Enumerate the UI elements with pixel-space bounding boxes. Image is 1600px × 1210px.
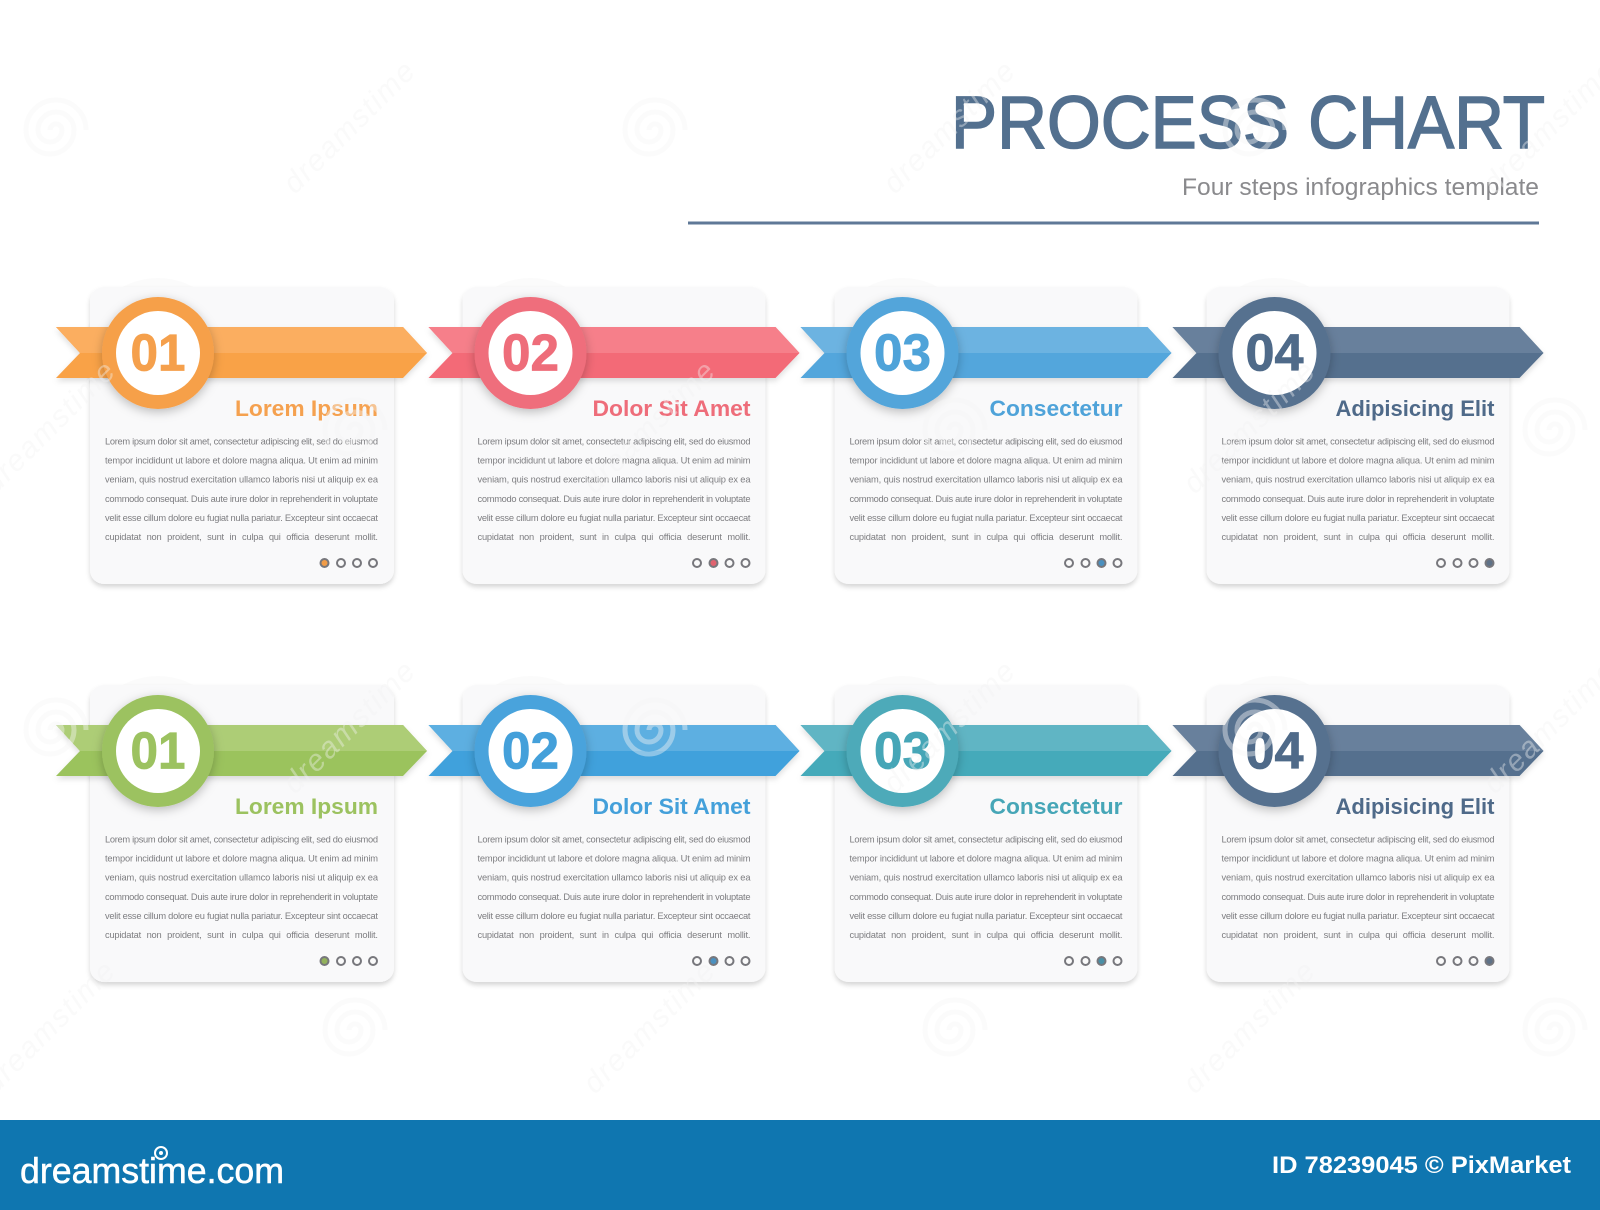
number badge 04: 04 bbox=[1246, 324, 1304, 382]
card halo bbox=[83, 676, 233, 826]
arrow ribbon bbox=[1172, 327, 1544, 378]
body text: commodo consequat. Duis aute irure dolor in reprehenderit in voluptate bbox=[1222, 892, 1494, 902]
body text: tempor incididunt ut labore et dolore magna aliqua. Ut enim ad minim bbox=[105, 854, 378, 864]
body text: velit esse cillum dolore eu fugiat nulla pariatur. Excepteur sint occaecat bbox=[1222, 513, 1495, 523]
body text bbox=[1222, 436, 1495, 542]
card halo bbox=[456, 278, 606, 428]
watermark overlay: dreamstime bbox=[577, 955, 722, 1100]
panel: row 2 step 2 blue bbox=[428, 676, 800, 982]
body text: velit esse cillum dolore eu fugiat nulla pariatur. Excepteur sint occaecat bbox=[850, 513, 1123, 523]
body text: cupidatat non proident, sunt in culpa qui officia deserunt mollit. bbox=[1222, 930, 1494, 940]
card heading: Dolor Sit Amet bbox=[592, 396, 751, 421]
card halo bbox=[83, 278, 233, 428]
card heading: Consectetur bbox=[990, 396, 1123, 421]
card heading: Lorem Ipsum bbox=[235, 396, 378, 421]
body text: tempor incididunt ut labore et dolore magna aliqua. Ut enim ad minim bbox=[850, 456, 1123, 466]
arrow ribbon bbox=[1172, 725, 1544, 776]
body text: velit esse cillum dolore eu fugiat nulla pariatur. Excepteur sint occaecat bbox=[478, 513, 751, 523]
number badge 03: 03 bbox=[874, 324, 931, 382]
body text: veniam, quis nostrud exercitation ullamco laboris nisi ut aliquip ex ea bbox=[478, 474, 751, 484]
body text bbox=[105, 436, 379, 542]
arrow ribbon bbox=[428, 327, 800, 378]
panel: row 1 step 3 blue bbox=[800, 278, 1172, 584]
watermark overlay: dreamstime bbox=[277, 655, 422, 800]
body text: Lorem ipsum dolor sit amet, consectetur adipiscing elit, sed do eiusmod bbox=[105, 834, 378, 844]
step dots bbox=[1437, 559, 1494, 567]
subtitle: Four steps infographics template bbox=[1182, 174, 1539, 201]
number badge 02 bbox=[474, 695, 586, 807]
card background bbox=[1206, 287, 1510, 584]
number badge 01: 01 bbox=[130, 722, 186, 780]
number badge 02: 02 bbox=[502, 324, 559, 382]
body text: velit esse cillum dolore eu fugiat nulla pariatur. Excepteur sint occaecat bbox=[850, 911, 1123, 921]
number badge 04 bbox=[1218, 297, 1330, 409]
body text: Lorem ipsum dolor sit amet, consectetur adipiscing elit, sed do eiusmod bbox=[850, 436, 1123, 446]
body text: cupidatat non proident, sunt in culpa qui officia deserunt mollit. bbox=[105, 930, 378, 940]
body text: commodo consequat. Duis aute irure dolor in reprehenderit in voluptate bbox=[478, 494, 750, 504]
body text: tempor incididunt ut labore et dolore magna aliqua. Ut enim ad minim bbox=[478, 854, 751, 864]
body text: Lorem ipsum dolor sit amet, consectetur adipiscing elit, sed do eiusmod bbox=[850, 834, 1123, 844]
card background bbox=[462, 287, 766, 584]
body text: commodo consequat. Duis aute irure dolor in reprehenderit in voluptate bbox=[850, 892, 1122, 902]
body text: veniam, quis nostrud exercitation ullamco laboris nisi ut aliquip ex ea bbox=[105, 474, 379, 484]
body text: Lorem ipsum dolor sit amet, consectetur adipiscing elit, sed do eiusmod bbox=[1222, 436, 1495, 446]
step dots bbox=[693, 957, 750, 965]
body text: commodo consequat. Duis aute irure dolor in reprehenderit in voluptate bbox=[105, 494, 378, 504]
number badge 02 bbox=[474, 297, 586, 409]
body text: veniam, quis nostrud exercitation ullamco laboris nisi ut aliquip ex ea bbox=[1222, 872, 1495, 882]
card halo bbox=[828, 676, 978, 826]
body text: veniam, quis nostrud exercitation ullamco laboris nisi ut aliquip ex ea bbox=[850, 872, 1123, 882]
number badge 03 bbox=[846, 297, 958, 409]
arrow ribbon bbox=[800, 725, 1172, 776]
watermark overlay: dreamstime bbox=[577, 355, 722, 500]
body text: velit esse cillum dolore eu fugiat nulla pariatur. Excepteur sint occaecat bbox=[105, 911, 378, 921]
watermark overlay: dreamstime bbox=[1177, 355, 1322, 500]
card halo bbox=[1200, 676, 1350, 826]
panel: row 2 step 4 navy bbox=[1172, 676, 1544, 982]
body text bbox=[850, 436, 1123, 542]
panel: row 1 step 4 navy bbox=[1172, 278, 1544, 584]
watermark overlay: dreamstime bbox=[877, 655, 1022, 800]
body text: velit esse cillum dolore eu fugiat nulla pariatur. Excepteur sint occaecat bbox=[105, 513, 378, 523]
body text: commodo consequat. Duis aute irure dolor in reprehenderit in voluptate bbox=[478, 892, 750, 902]
card halo bbox=[1200, 278, 1350, 428]
body text: commodo consequat. Duis aute irure dolor in reprehenderit in voluptate bbox=[850, 494, 1122, 504]
body text: cupidatat non proident, sunt in culpa qui officia deserunt mollit. bbox=[850, 532, 1122, 542]
body text bbox=[850, 834, 1123, 940]
number badge 01 bbox=[102, 695, 214, 807]
number badge 03 bbox=[846, 695, 958, 807]
card background bbox=[462, 685, 766, 982]
title: PROCESS CHART bbox=[951, 81, 1545, 164]
step dots bbox=[693, 559, 750, 567]
step dots bbox=[1065, 559, 1122, 567]
body text: Lorem ipsum dolor sit amet, consectetur adipiscing elit, sed do eiusmod bbox=[478, 436, 751, 446]
body text: cupidatat non proident, sunt in culpa qui officia deserunt mollit. bbox=[850, 930, 1122, 940]
body text: tempor incididunt ut labore et dolore magna aliqua. Ut enim ad minim bbox=[478, 456, 751, 466]
watermark overlay: dreamstime bbox=[1177, 955, 1322, 1100]
arrow ribbon bbox=[428, 725, 800, 776]
step dots bbox=[320, 559, 377, 567]
step dots bbox=[1065, 957, 1122, 965]
panel: row 2 step 3 teal bbox=[800, 676, 1172, 982]
step dots bbox=[1437, 957, 1494, 965]
card heading: Adipisicing Elit bbox=[1336, 396, 1495, 421]
body text: veniam, quis nostrud exercitation ullamco laboris nisi ut aliquip ex ea bbox=[1222, 474, 1495, 484]
body text: commodo consequat. Duis aute irure dolor in reprehenderit in voluptate bbox=[105, 892, 378, 902]
body text: commodo consequat. Duis aute irure dolor in reprehenderit in voluptate bbox=[1222, 494, 1494, 504]
body text: veniam, quis nostrud exercitation ullamco laboris nisi ut aliquip ex ea bbox=[105, 872, 379, 882]
card background bbox=[90, 287, 394, 584]
footer bar bbox=[0, 1120, 1600, 1210]
body text: tempor incididunt ut labore et dolore magna aliqua. Ut enim ad minim bbox=[105, 456, 378, 466]
body text bbox=[478, 436, 751, 542]
body text: cupidatat non proident, sunt in culpa qui officia deserunt mollit. bbox=[105, 532, 378, 542]
panel: row 1 step 1 orange bbox=[56, 278, 427, 584]
body text: velit esse cillum dolore eu fugiat nulla pariatur. Excepteur sint occaecat bbox=[1222, 911, 1495, 921]
card halo bbox=[828, 278, 978, 428]
number badge 02: 02 bbox=[502, 722, 559, 780]
arrow ribbon bbox=[56, 327, 427, 378]
body text: cupidatat non proident, sunt in culpa qui officia deserunt mollit. bbox=[478, 532, 750, 542]
body text bbox=[1222, 834, 1495, 940]
body text: Lorem ipsum dolor sit amet, consectetur adipiscing elit, sed do eiusmod bbox=[105, 436, 378, 446]
watermark overlay: dreamstime bbox=[877, 55, 1022, 200]
arrow ribbon bbox=[800, 327, 1172, 378]
body text: cupidatat non proident, sunt in culpa qui officia deserunt mollit. bbox=[1222, 532, 1494, 542]
card halo bbox=[456, 676, 606, 826]
number badge 04 bbox=[1218, 695, 1330, 807]
arrow ribbon bbox=[56, 725, 427, 776]
number badge 01 bbox=[102, 297, 214, 409]
card heading: Dolor Sit Amet bbox=[592, 794, 751, 819]
body text: tempor incididunt ut labore et dolore magna aliqua. Ut enim ad minim bbox=[850, 854, 1123, 864]
card background bbox=[1206, 685, 1510, 982]
body text: Lorem ipsum dolor sit amet, consectetur adipiscing elit, sed do eiusmod bbox=[1222, 834, 1495, 844]
body text: veniam, quis nostrud exercitation ullamco laboris nisi ut aliquip ex ea bbox=[478, 872, 751, 882]
footer logo: dreamstime.com bbox=[20, 1150, 284, 1191]
number badge 03: 03 bbox=[874, 722, 931, 780]
card heading: Lorem Ipsum bbox=[235, 794, 378, 819]
body text bbox=[105, 834, 379, 940]
body text: veniam, quis nostrud exercitation ullamco laboris nisi ut aliquip ex ea bbox=[850, 474, 1123, 484]
number badge 01: 01 bbox=[130, 324, 186, 382]
card heading: Consectetur bbox=[990, 794, 1123, 819]
body text: tempor incididunt ut labore et dolore magna aliqua. Ut enim ad minim bbox=[1222, 456, 1495, 466]
watermark overlay: dreamstime bbox=[277, 55, 422, 200]
body text bbox=[478, 834, 751, 940]
card background bbox=[90, 685, 394, 982]
panel: row 2 step 1 green bbox=[56, 676, 427, 982]
footer credit: ID 78239045 © PixMarket bbox=[1272, 1152, 1571, 1179]
card background bbox=[834, 287, 1138, 584]
body text: Lorem ipsum dolor sit amet, consectetur adipiscing elit, sed do eiusmod bbox=[478, 834, 751, 844]
body text: velit esse cillum dolore eu fugiat nulla pariatur. Excepteur sint occaecat bbox=[478, 911, 751, 921]
step dots bbox=[320, 957, 377, 965]
card background bbox=[834, 685, 1138, 982]
body text: cupidatat non proident, sunt in culpa qui officia deserunt mollit. bbox=[478, 930, 750, 940]
card heading: Adipisicing Elit bbox=[1336, 794, 1495, 819]
number badge 04: 04 bbox=[1246, 722, 1304, 780]
body text: tempor incididunt ut labore et dolore magna aliqua. Ut enim ad minim bbox=[1222, 854, 1495, 864]
header rule bbox=[688, 222, 1539, 224]
panel: row 1 step 2 red bbox=[428, 278, 800, 584]
